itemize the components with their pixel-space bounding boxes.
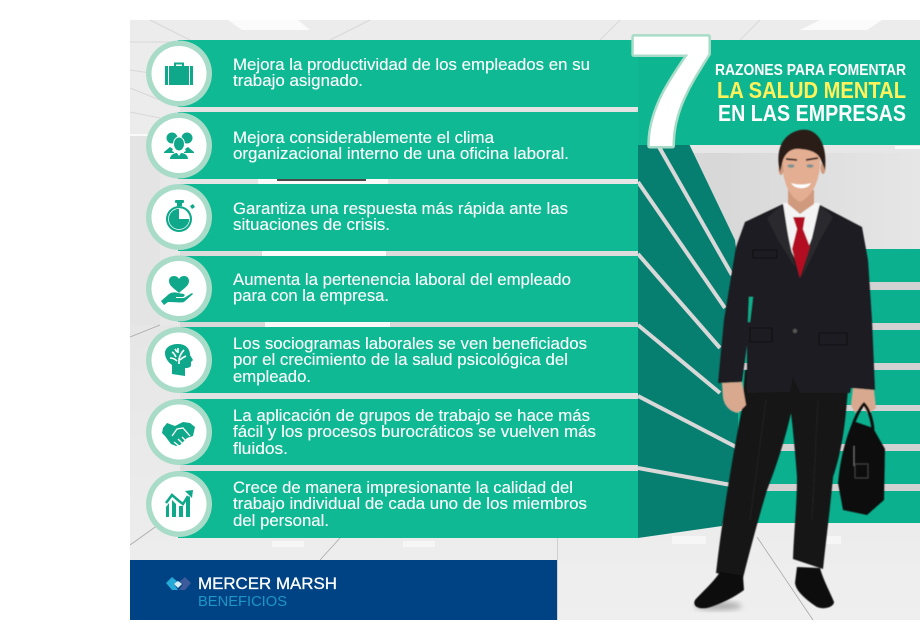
- right-hand stripe gaps: [725, 282, 920, 492]
- briefcase: [838, 421, 885, 515]
- text: reason 3: Garantiza una respuesta más rápida ante las: [233, 200, 568, 218]
- reason 2: [146, 112, 638, 179]
- text: reason 6: La aplicación de grupos de trabajo se hace más: [233, 407, 590, 425]
- icon: head with brain: [165, 344, 193, 376]
- perspective fan lines: [638, 110, 738, 485]
- reason 6: [146, 399, 638, 465]
- lapels: [767, 205, 833, 277]
- text: brand name: MERCER MARSH: [198, 574, 337, 593]
- neck: [788, 190, 814, 214]
- text: reason 5: por el crecimiento de la salud psicológica del: [233, 351, 568, 369]
- icon: logo mark: [166, 577, 191, 590]
- title: [715, 62, 906, 126]
- right shoe: [795, 567, 834, 608]
- text: reason 3: situaciones de crisis.: [233, 216, 390, 234]
- hair: [778, 130, 825, 172]
- big number 7: 7: [627, 2, 715, 180]
- eyes and brows: [786, 158, 818, 160]
- left hand: [722, 382, 746, 413]
- reason 4: [146, 256, 638, 322]
- text: reason 2: Mejora considerablemente el clima: [233, 129, 495, 147]
- icon: group of people: [164, 132, 194, 159]
- jacket: [718, 204, 875, 393]
- jacket arm gaps: [748, 297, 753, 322]
- footer: Mercer Marsh logo block: [130, 560, 557, 620]
- text: reason 4: Aumenta la pertenencia laboral del empleado: [233, 271, 571, 289]
- text: reason 6: fluidos.: [233, 440, 288, 458]
- right-hand green stripes behind the man: [722, 249, 920, 523]
- reason 7: [146, 471, 638, 538]
- text: reason 7: trabajo individual de cada uno de los miembros: [233, 495, 587, 513]
- text: reason 5: empleado.: [233, 368, 311, 386]
- text: reason 7: del personal.: [233, 512, 329, 530]
- text: reason 1: trabajo asignado.: [233, 72, 363, 90]
- reason 1: [146, 40, 638, 107]
- icon: heart in hand: [161, 276, 193, 305]
- icon: stopwatch: [166, 200, 195, 232]
- reason 3: [146, 184, 638, 251]
- face: [782, 142, 820, 202]
- pockets and button: [750, 250, 847, 345]
- text: reason 4: para con la empresa.: [233, 287, 389, 305]
- text: beneficios: BENEFICIOS: [198, 593, 287, 610]
- smile: [791, 183, 811, 188]
- reason 5: [146, 327, 638, 393]
- top banner background: [638, 40, 920, 145]
- tie: [792, 217, 810, 278]
- ears: [778, 163, 784, 175]
- man in suit with briefcase: [694, 130, 885, 610]
- dark green perspective wedge: [638, 60, 738, 538]
- icon: handshake: [162, 422, 195, 446]
- shoe shadows: [694, 602, 742, 610]
- text: reason 6: fácil y los procesos burocráticos se vuelven más: [233, 423, 596, 441]
- icon: growth chart: [166, 490, 193, 517]
- text: reason 1: Mejora la productividad de los empleados en su: [233, 56, 590, 74]
- text: reason 2: organizacional interno de una oficina laboral.: [233, 145, 569, 163]
- trousers: [716, 370, 850, 578]
- text: reason 5: Los sociogramas laborales se ven beneficiados: [233, 335, 587, 353]
- left shoe: [694, 572, 744, 609]
- briefcase handle: [852, 404, 873, 430]
- right hand: [851, 388, 876, 414]
- text: reason 7: Crece de manera impresionante la calidad del: [233, 479, 573, 497]
- shirt: [783, 203, 820, 270]
- reasons list: [146, 40, 638, 538]
- icon: briefcase: [165, 62, 193, 85]
